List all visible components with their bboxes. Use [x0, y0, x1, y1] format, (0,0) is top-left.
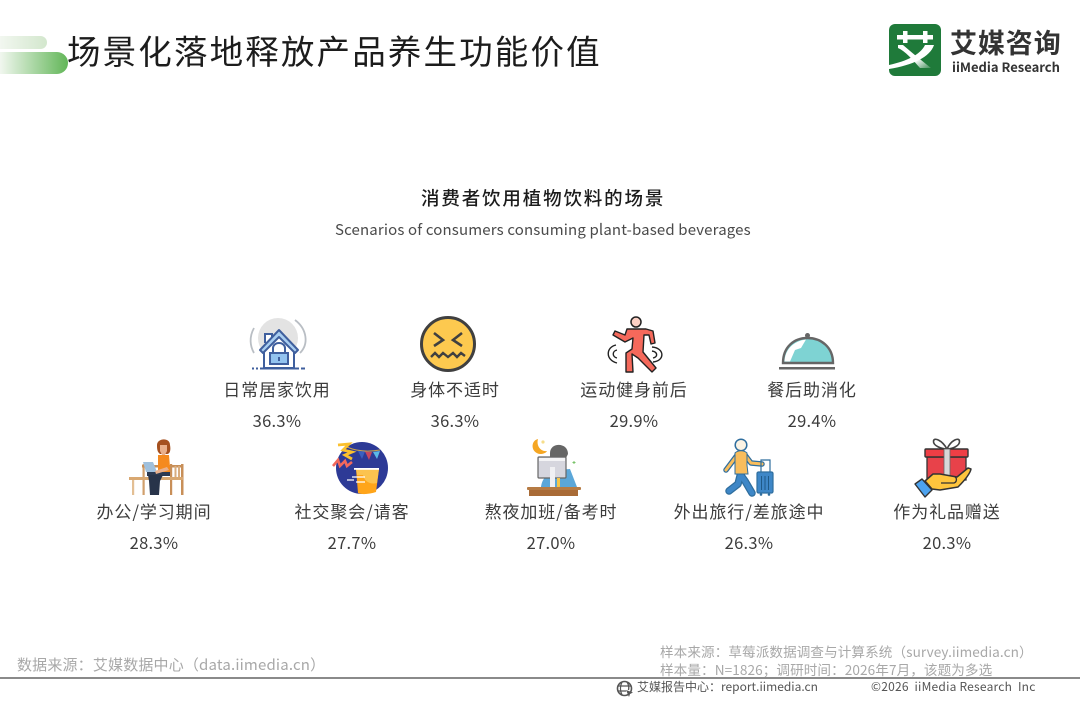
chart subtitle: Scenarios of consumers consuming plant-based beverages	[335, 219, 751, 240]
value: 27.7%	[328, 530, 376, 554]
value: 26.3%	[725, 530, 773, 554]
report link: 艾媒报告中心：report.iimedia.cn	[637, 678, 818, 695]
icon: traveller with suitcase	[723, 438, 774, 497]
logo English name: iiMedia Research	[952, 57, 1060, 76]
chart heading: 消费者饮用植物饮料的场景	[421, 185, 665, 211]
logo mark	[889, 24, 941, 76]
item: gift	[893, 438, 1001, 554]
item: exercise	[580, 316, 688, 432]
icon: person at computer at night	[527, 439, 581, 496]
item: late night	[485, 439, 617, 554]
copyright: ©2026 iiMedia Research Inc	[871, 678, 1036, 695]
label: 外出旅行/差旅途中	[674, 498, 824, 523]
label: 身体不适时	[410, 376, 500, 401]
value: 29.4%	[788, 408, 836, 432]
footer line	[0, 677, 1080, 679]
item: after meals	[767, 333, 857, 432]
icon: woman with laptop on bench	[129, 439, 184, 495]
icon: party cup	[332, 442, 388, 494]
label: 熬夜加班/备考时	[485, 498, 617, 523]
label: 办公/学习期间	[97, 498, 211, 523]
value: 29.9%	[610, 408, 658, 432]
value: 27.0%	[527, 530, 575, 554]
icon: uneasy face	[420, 316, 476, 372]
icon: food cloche	[779, 333, 835, 370]
icon: running person	[608, 316, 663, 373]
item: social	[295, 442, 409, 554]
label: 餐后助消化	[767, 376, 857, 401]
label: 日常居家饮用	[223, 376, 331, 401]
logo Chinese name: 艾媒咨询	[950, 22, 1062, 61]
title: 场景化落地释放产品养生功能价值	[67, 25, 602, 74]
icon: house with lock	[250, 318, 306, 370]
sample size: 样本量：N=1826；调研时间：2026年7月，该题为多选	[660, 659, 992, 679]
sample source: 样本来源：草莓派数据调查与计算系统（survey.iimedia.cn）	[660, 641, 1033, 661]
item: office / study	[97, 439, 211, 554]
icon: report globe	[616, 680, 633, 697]
logo: iiMedia	[889, 22, 1062, 76]
item: discomfort	[410, 316, 500, 432]
data source: 数据来源：艾媒数据中心（data.iimedia.cn）	[17, 654, 325, 675]
label: 运动健身前后	[580, 376, 688, 401]
item: home	[223, 318, 331, 432]
item: travel	[674, 438, 824, 554]
label: 社交聚会/请客	[295, 498, 409, 523]
header accent bars	[0, 36, 68, 74]
icon: hand holding gift	[914, 438, 972, 498]
value: 36.3%	[253, 408, 301, 432]
value: 20.3%	[923, 530, 971, 554]
label: 作为礼品赠送	[893, 498, 1001, 523]
value: 28.3%	[130, 530, 178, 554]
value: 36.3%	[431, 408, 479, 432]
